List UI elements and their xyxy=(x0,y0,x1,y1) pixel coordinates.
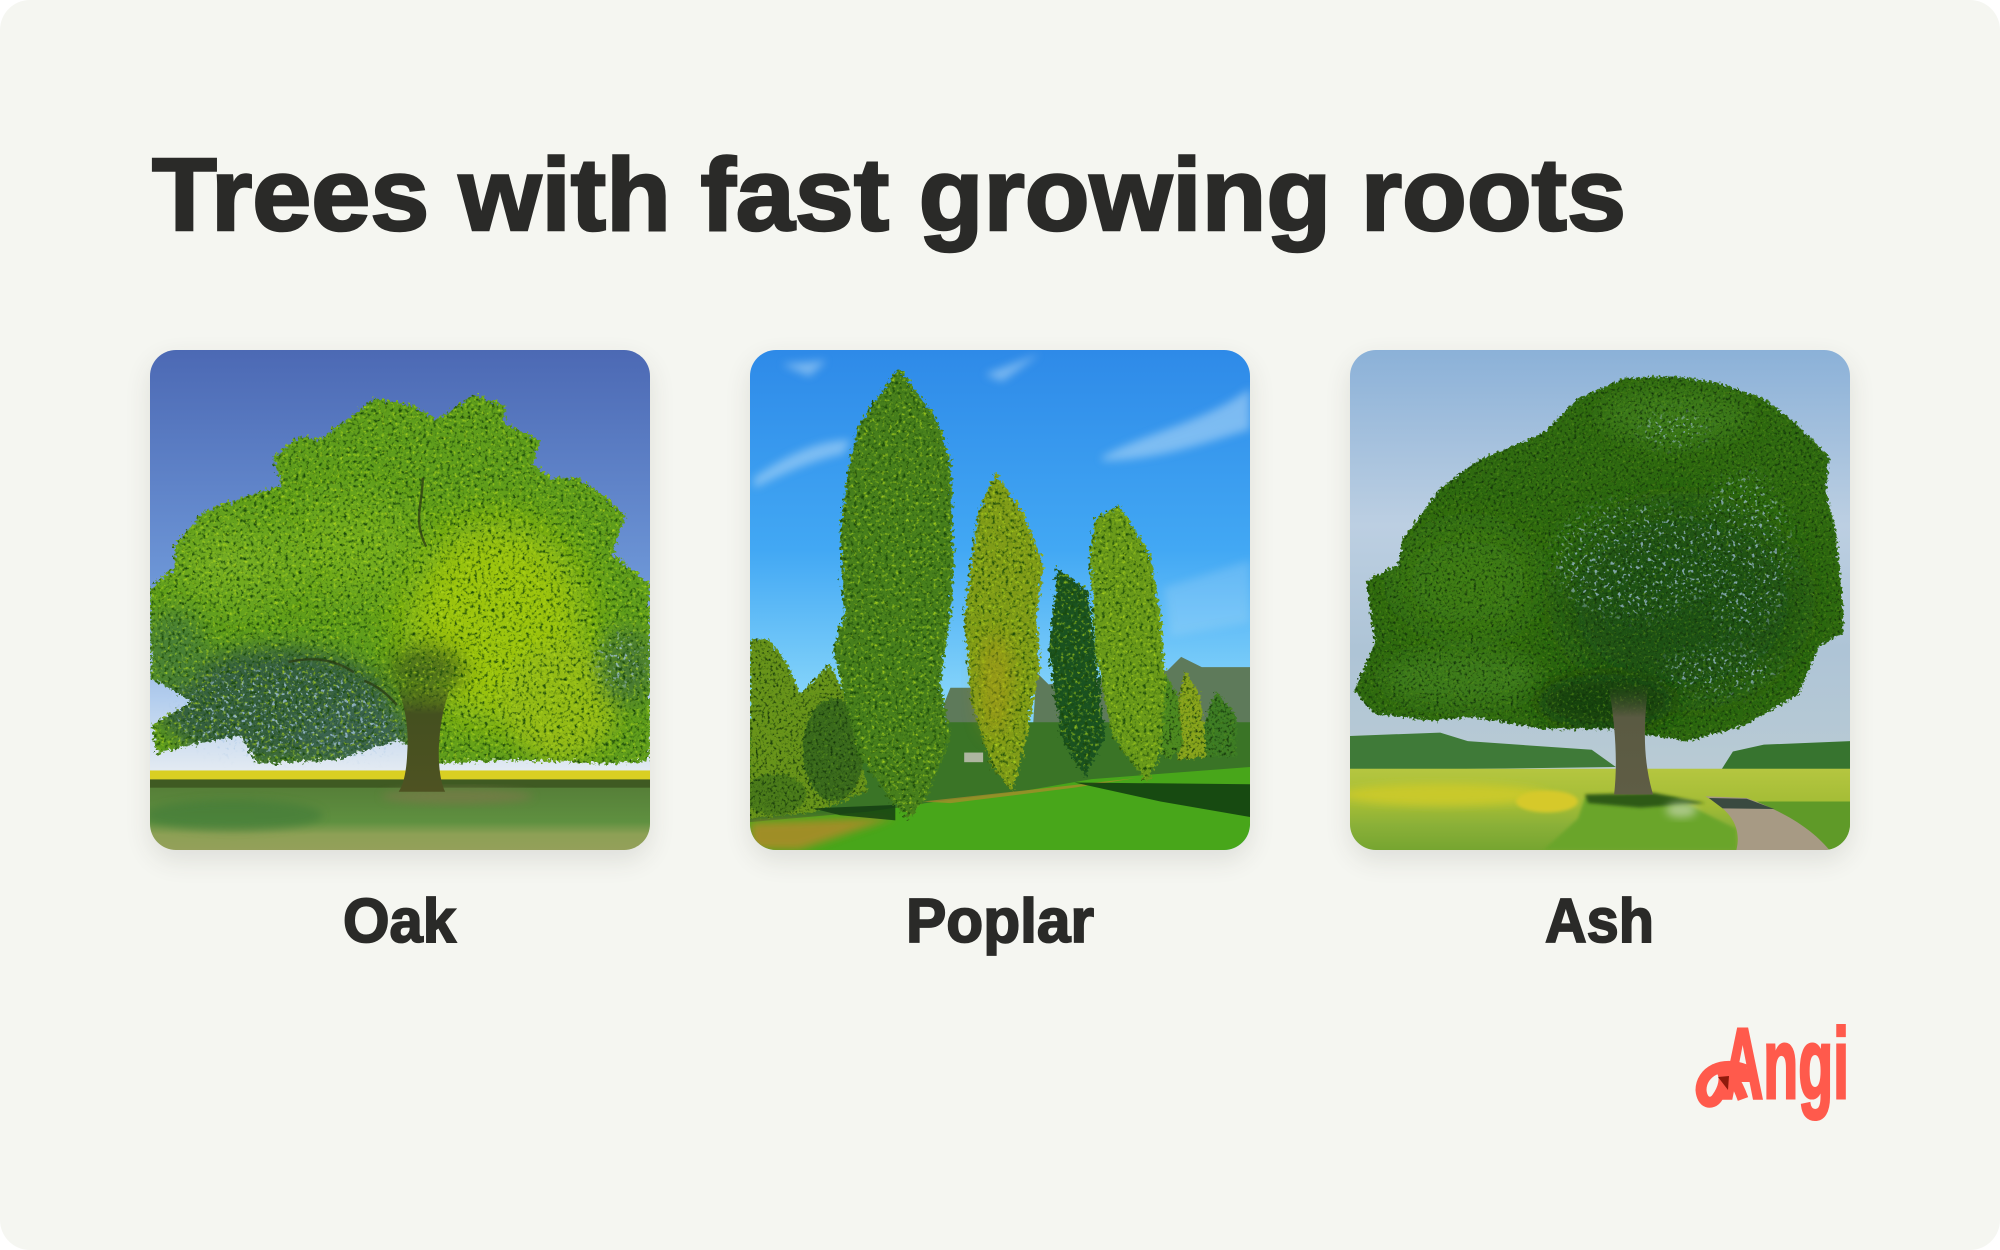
label: Oak: Oak xyxy=(343,887,456,956)
logo: Angi: Angi xyxy=(1722,1008,1849,1120)
photo: poplar trees xyxy=(750,350,1250,850)
title: Trees with fast growing roots xyxy=(152,137,1626,252)
label: Poplar: Poplar xyxy=(906,887,1094,956)
label: Ash: Ash xyxy=(1545,887,1654,956)
photo: ash tree xyxy=(1350,350,1850,850)
photo: oak tree xyxy=(150,350,650,850)
